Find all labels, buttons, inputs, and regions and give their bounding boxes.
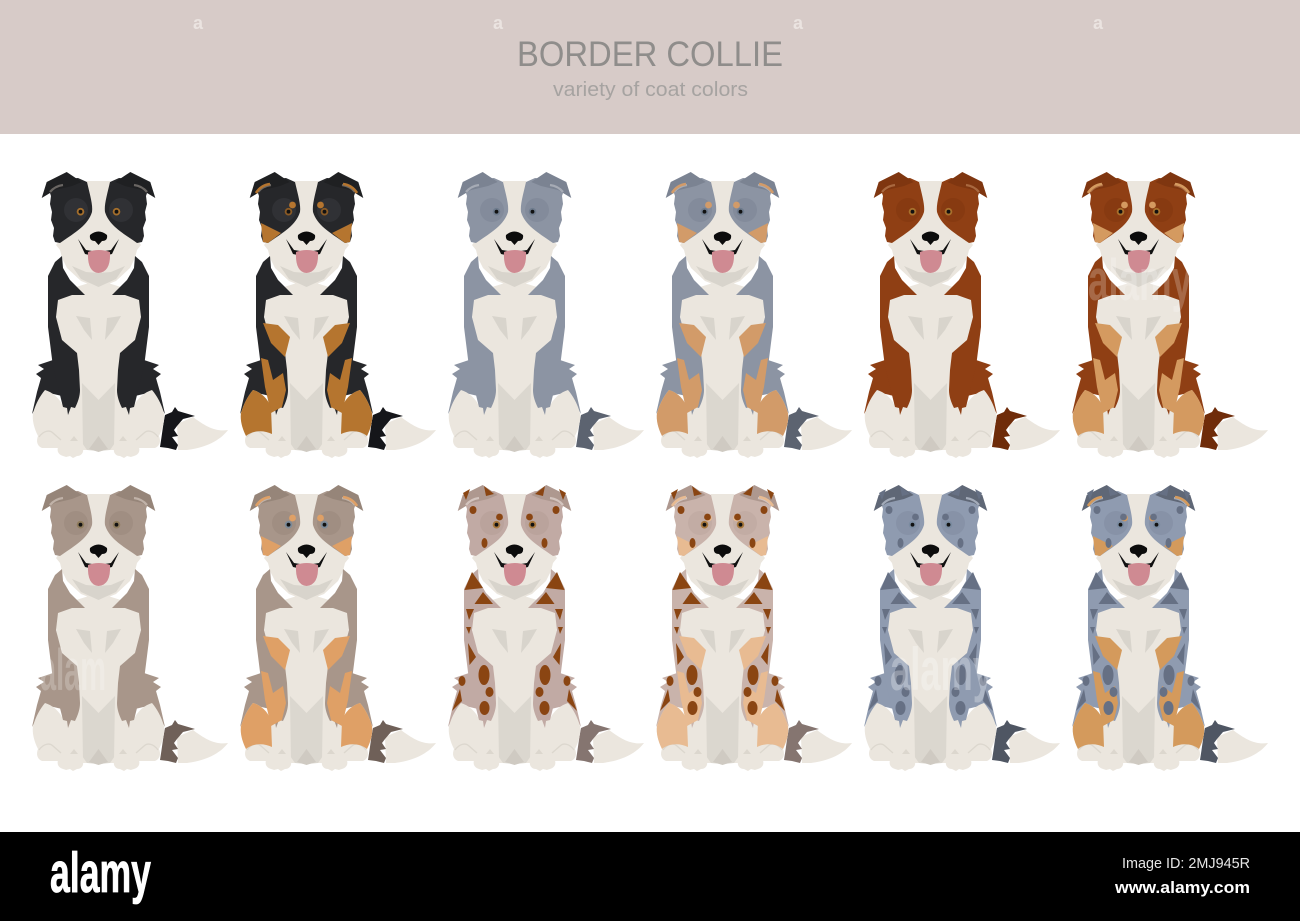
dog: blue and white — [448, 172, 644, 458]
header band — [0, 0, 1300, 134]
image id: Image ID: 2MJ945R — [1122, 855, 1250, 872]
dog: black tricolor — [240, 172, 436, 458]
header band: a — [193, 13, 204, 33]
dog: lilac and white — [32, 485, 228, 771]
website: www.alamy.com — [1114, 878, 1250, 897]
header band: a — [493, 13, 504, 33]
header band: a — [1093, 13, 1104, 33]
infographic canvas: alam — [40, 638, 106, 703]
footer logo: alamy — [50, 841, 151, 905]
subtitle: variety of coat colors — [553, 79, 748, 101]
dog: red tricolor — [1072, 172, 1268, 458]
dog: lilac tricolor — [240, 485, 436, 771]
dog: blue tricolor — [656, 172, 852, 458]
dog: blue merle — [864, 485, 1060, 771]
header band: a — [793, 13, 804, 33]
dog: blue merle tricolor — [1072, 485, 1268, 771]
dog: red merle — [448, 485, 644, 771]
watermark: row two right: alamy — [890, 636, 993, 703]
footer bar — [0, 832, 1300, 921]
dog: red merle tricolor — [656, 485, 852, 771]
dog: black and white — [32, 172, 228, 458]
title: BORDER COLLIE — [517, 35, 783, 74]
dog: red and white — [864, 172, 1060, 458]
watermark: row one: alamy — [1088, 248, 1192, 313]
